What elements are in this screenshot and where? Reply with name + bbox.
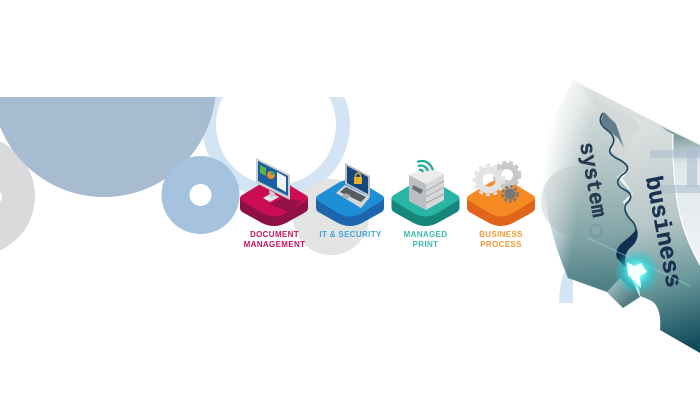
white edge line — [673, 134, 700, 265]
left gear — [543, 80, 640, 308]
large blue-grey circle — [0, 97, 216, 197]
label: managed print: PRINT — [413, 240, 438, 249]
label: document management — [244, 230, 305, 249]
pale blue ring arc at right — [559, 271, 573, 303]
blue platform — [316, 180, 384, 226]
tile: business process — [467, 162, 535, 249]
ghost panel — [660, 126, 700, 266]
label: business process: PROCESS — [480, 240, 522, 249]
background circles — [0, 97, 573, 303]
gear artwork — [543, 80, 700, 353]
grey circle at right — [541, 166, 572, 232]
blue donut — [176, 170, 226, 220]
tile: document management — [240, 158, 308, 249]
red platform — [240, 180, 308, 226]
icon: laptop with padlock — [336, 163, 370, 208]
label: business process: BUSINESS — [479, 230, 523, 239]
label: IT and security: IT & SECURITY — [319, 230, 382, 239]
orange platform — [467, 180, 535, 226]
grey ring at left edge — [0, 136, 35, 256]
pale base between the gears — [574, 80, 700, 175]
right gear — [617, 116, 700, 353]
icon: computer monitor — [256, 158, 290, 202]
white spark — [627, 262, 647, 288]
gear photo: system and business — [543, 80, 700, 353]
light blue ring — [203, 97, 350, 192]
label: managed print: MANAGED — [404, 230, 447, 239]
label: business process — [479, 230, 523, 249]
icon: wifi signal — [417, 161, 433, 172]
label: document management: DOCUMENT — [250, 230, 299, 239]
label: document management: MANAGEMENT — [244, 240, 305, 249]
text: system: system — [573, 141, 609, 219]
tile: managed print — [392, 161, 460, 249]
grey circle behind IT tile — [293, 179, 369, 255]
icon: gears — [474, 162, 520, 202]
tile: IT and security — [316, 163, 384, 239]
teal platform — [392, 180, 460, 226]
dark gap between gears — [600, 113, 636, 240]
shaded wedge at top of gears — [600, 112, 624, 148]
tooth block — [607, 278, 638, 308]
ghost circle mark — [590, 225, 602, 237]
text: business: business — [638, 174, 686, 290]
cyan spark glow — [614, 249, 660, 295]
dark lower gap — [616, 229, 638, 268]
label: managed print — [404, 230, 447, 249]
ring hole at left edge — [0, 192, 2, 202]
icon: printer — [409, 167, 444, 210]
light streak — [588, 238, 690, 286]
ghost letter bars — [650, 150, 700, 193]
